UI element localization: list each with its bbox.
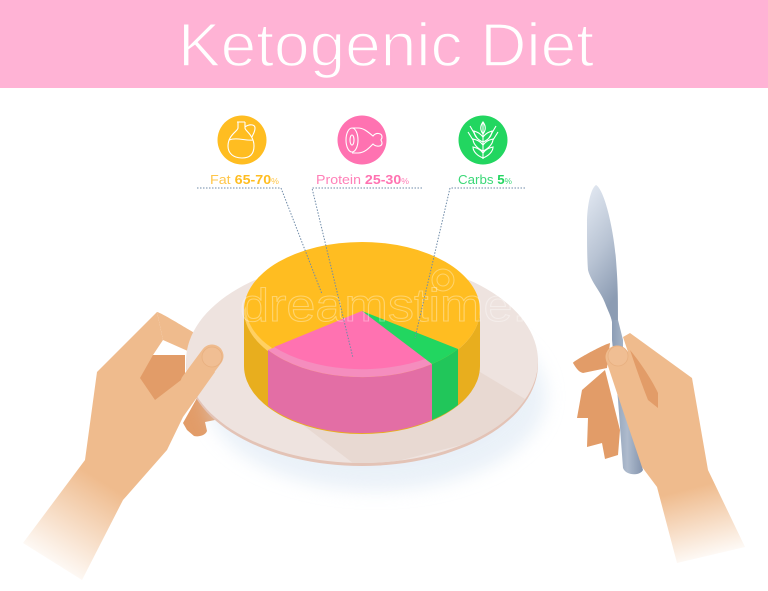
yellow rim highlight: [244, 306, 272, 351]
leader line: fat: [197, 188, 322, 294]
palm and forearm: [23, 312, 215, 580]
leader line: protein: [312, 188, 422, 358]
icon: wheat: [458, 116, 508, 164]
leader line: carbs: [415, 188, 525, 338]
thumbnail: [608, 346, 628, 366]
knife: [587, 185, 643, 474]
label: fat: Fat 65-70 %: [210, 172, 279, 187]
palm shadow: [140, 355, 185, 400]
title: Ketogenic Diet: [178, 11, 594, 79]
thumb crease: [630, 350, 658, 408]
label: carbs: Carbs 5%: [458, 172, 512, 187]
green side: [432, 349, 458, 420]
left hand, fingers behind plate: [157, 312, 215, 436]
watermark: dreamstime.: [240, 279, 527, 331]
yellow side: [244, 310, 480, 434]
right hand: [573, 333, 745, 563]
thumbnail: [202, 347, 222, 367]
pink slice: [268, 311, 432, 377]
pie chart: [244, 242, 480, 434]
thumb: [192, 356, 212, 383]
plate: [186, 279, 538, 466]
title banner: [0, 0, 768, 88]
thumb tip: [606, 346, 628, 368]
pie long shadow on plate: [304, 372, 525, 463]
back fingers: [573, 343, 610, 373]
icon: oil jug: [218, 116, 266, 164]
plate shadow: [206, 302, 546, 490]
yellow top: [244, 242, 480, 378]
green slice: [362, 311, 458, 364]
left hand: [23, 312, 222, 580]
hand and forearm: [606, 333, 745, 563]
icon: ham: [338, 116, 386, 164]
label: protein: Protein 25-30 %: [316, 172, 409, 187]
pink side: [268, 350, 432, 433]
